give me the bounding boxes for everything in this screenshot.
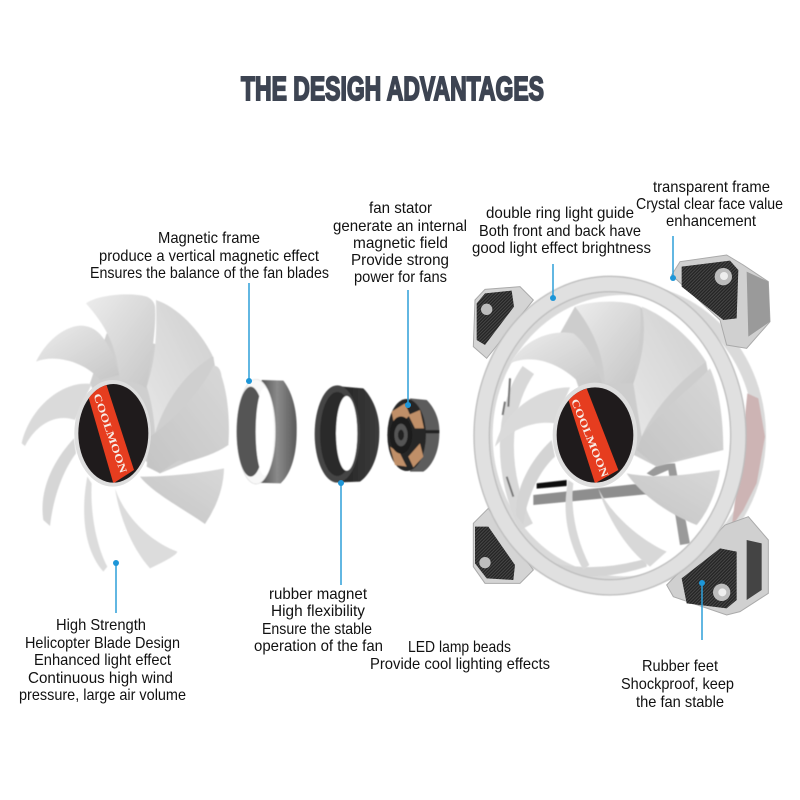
blades xyxy=(495,302,723,570)
back ring and frame xyxy=(487,289,765,582)
text block: high strength blade xyxy=(19,617,186,704)
title: THE DESIGH ADVANTAGES xyxy=(241,70,544,107)
hub: COOLMOON xyxy=(90,392,128,475)
text block: LED lamp beads: Provide cool lighting effects xyxy=(370,656,550,673)
callout line: rubber magnet xyxy=(338,480,344,585)
text block: fan stator: Provide strong xyxy=(351,252,449,269)
text block: high strength blade: pressure, large air volume xyxy=(19,687,186,704)
hub: COOLMOON xyxy=(568,398,610,479)
text block: rubber magnet: rubber magnet xyxy=(269,586,368,603)
callout line: transparent frame xyxy=(670,236,676,281)
text block: transparent frame: transparent frame xyxy=(653,179,770,196)
text block: transparent frame: enhancement xyxy=(666,213,757,230)
text block: transparent frame xyxy=(636,179,783,230)
text block: high strength blade: Enhanced light effect xyxy=(34,652,172,669)
fan impeller xyxy=(22,294,229,572)
text block: rubber magnet: operation of the fan xyxy=(254,638,383,655)
text block: double ring light guide: Both front and back have xyxy=(479,223,641,240)
text block: magnetic frame: Ensures the balance of the fan blades xyxy=(90,265,329,282)
callout line: rubber feet xyxy=(699,580,705,640)
text block: fan stator: fan stator xyxy=(369,200,433,217)
hub xyxy=(553,383,637,487)
text block: rubber feet: Rubber feet xyxy=(642,658,719,675)
text block: fan stator: power for fans xyxy=(354,269,447,286)
hub xyxy=(74,380,151,487)
callout line: magnetic frame xyxy=(246,283,252,384)
text block: rubber magnet xyxy=(254,586,383,655)
text block: rubber magnet: High flexibility xyxy=(271,603,365,620)
fan stator xyxy=(387,398,439,472)
text block: rubber feet xyxy=(621,658,734,711)
text block: magnetic frame: Magnetic frame xyxy=(158,230,260,247)
text block: fan stator: magnetic field xyxy=(353,235,448,252)
text block: LED lamp beads: LED lamp beads xyxy=(408,639,511,656)
assembled fan xyxy=(473,255,770,615)
front light ring xyxy=(482,284,738,587)
text block: magnetic frame xyxy=(90,230,329,282)
rubber magnet ring xyxy=(315,385,379,483)
corner mounts xyxy=(473,255,770,615)
text block: LED lamp beads xyxy=(370,639,550,673)
callout line: blade xyxy=(113,560,119,613)
text block: fan stator xyxy=(333,200,467,286)
text block: high strength blade: Continuous high wind xyxy=(28,670,173,687)
callout line: fan stator xyxy=(405,290,411,408)
text block: rubber magnet: Ensure the stable xyxy=(262,621,372,638)
text block: double ring light guide: good light effect brightness xyxy=(472,240,651,257)
callout line: ring light guide xyxy=(550,264,556,301)
text block: high strength blade: High Strength xyxy=(56,617,146,634)
text block: double ring light guide: double ring light guide xyxy=(486,205,634,222)
text block: high strength blade: Helicopter Blade Design xyxy=(25,635,180,652)
magnetic frame ring xyxy=(237,379,297,484)
text block: fan stator: generate an internal xyxy=(333,218,467,235)
text block: magnetic frame: produce a vertical magnetic effect xyxy=(99,248,320,265)
text block: transparent frame: Crystal clear face value xyxy=(636,196,783,213)
text block: rubber feet: Shockproof, keep xyxy=(621,676,734,693)
text block: rubber feet: the fan stable xyxy=(636,694,724,711)
text block: double ring light guide xyxy=(472,205,651,257)
